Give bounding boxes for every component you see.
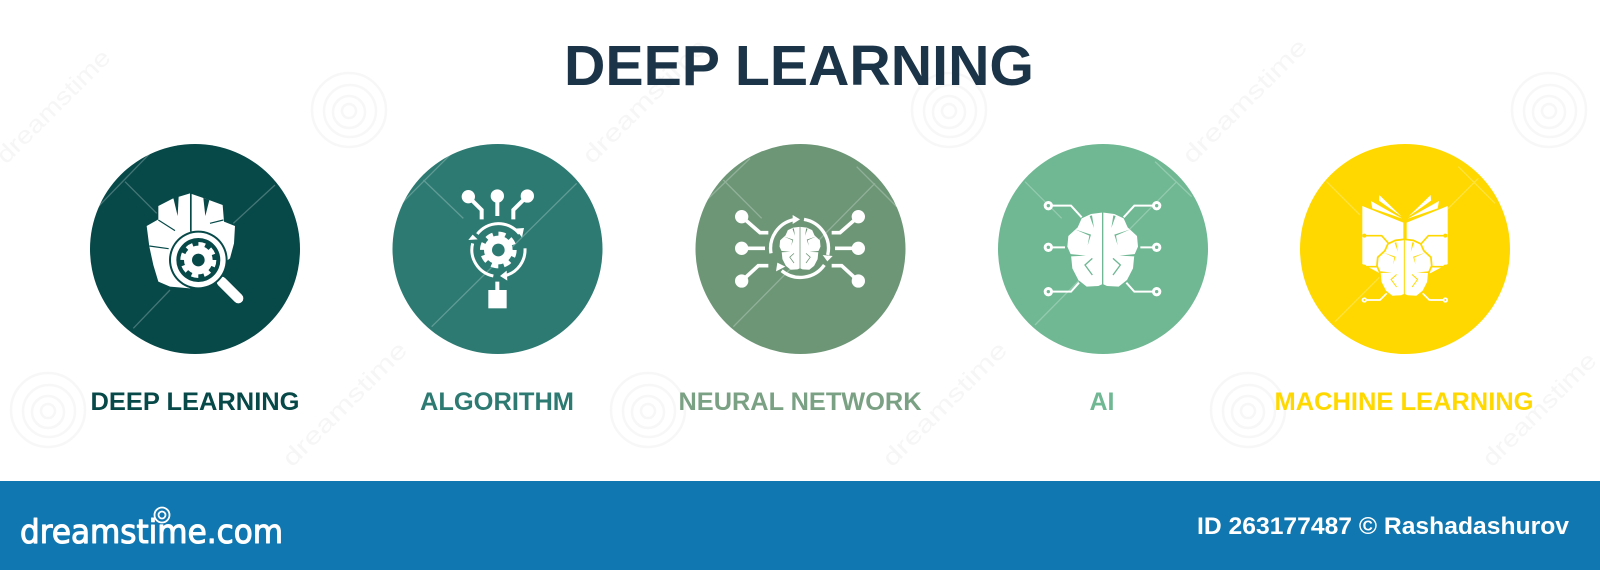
- watermark layer: dreamstime: [1477, 347, 1600, 472]
- title: DEEP LEARNING: [564, 34, 1034, 98]
- panel: deep learning: [90, 144, 300, 416]
- panel: machine learning: [1274, 144, 1534, 416]
- watermark layer: dreamstime: [877, 336, 1013, 472]
- panel: ai: [998, 144, 1208, 416]
- label: algorithm: ALGORITHM: [420, 388, 574, 416]
- label: deep learning: DEEP LEARNING: [90, 388, 300, 416]
- icon: gear algorithm: [397, 153, 577, 327]
- circle 5: [1300, 144, 1510, 354]
- watermark layer: [0, 33, 1600, 472]
- circle 3: [696, 144, 906, 354]
- icon: brain with magnifier and gear: [97, 153, 275, 328]
- watermark layer: dreamstime: [277, 336, 413, 472]
- watermark layer: dreamstime: [577, 33, 713, 169]
- panel: neural network: [678, 144, 922, 416]
- logo text: dreamstime.com: [20, 512, 283, 551]
- icon: book with brain: [1327, 167, 1495, 322]
- label: neural network: NEURAL NETWORK: [678, 388, 922, 416]
- label: ai: AI: [1090, 388, 1114, 416]
- image id and author: ID 263177487 © Rashadashurov: [1197, 513, 1569, 540]
- circle 4: [998, 144, 1208, 354]
- label: machine learning: MACHINE LEARNING: [1274, 388, 1534, 416]
- footer bar: [0, 481, 1600, 570]
- circle 1: [90, 144, 300, 354]
- panel: algorithm: [392, 144, 602, 416]
- icon: logo spiral: [154, 508, 170, 522]
- watermark layer: dreamstime: [1177, 33, 1313, 169]
- circle 2: [392, 144, 602, 354]
- icon: ai circuit brain: [1025, 162, 1192, 325]
- icon: neural network brain: [707, 158, 897, 327]
